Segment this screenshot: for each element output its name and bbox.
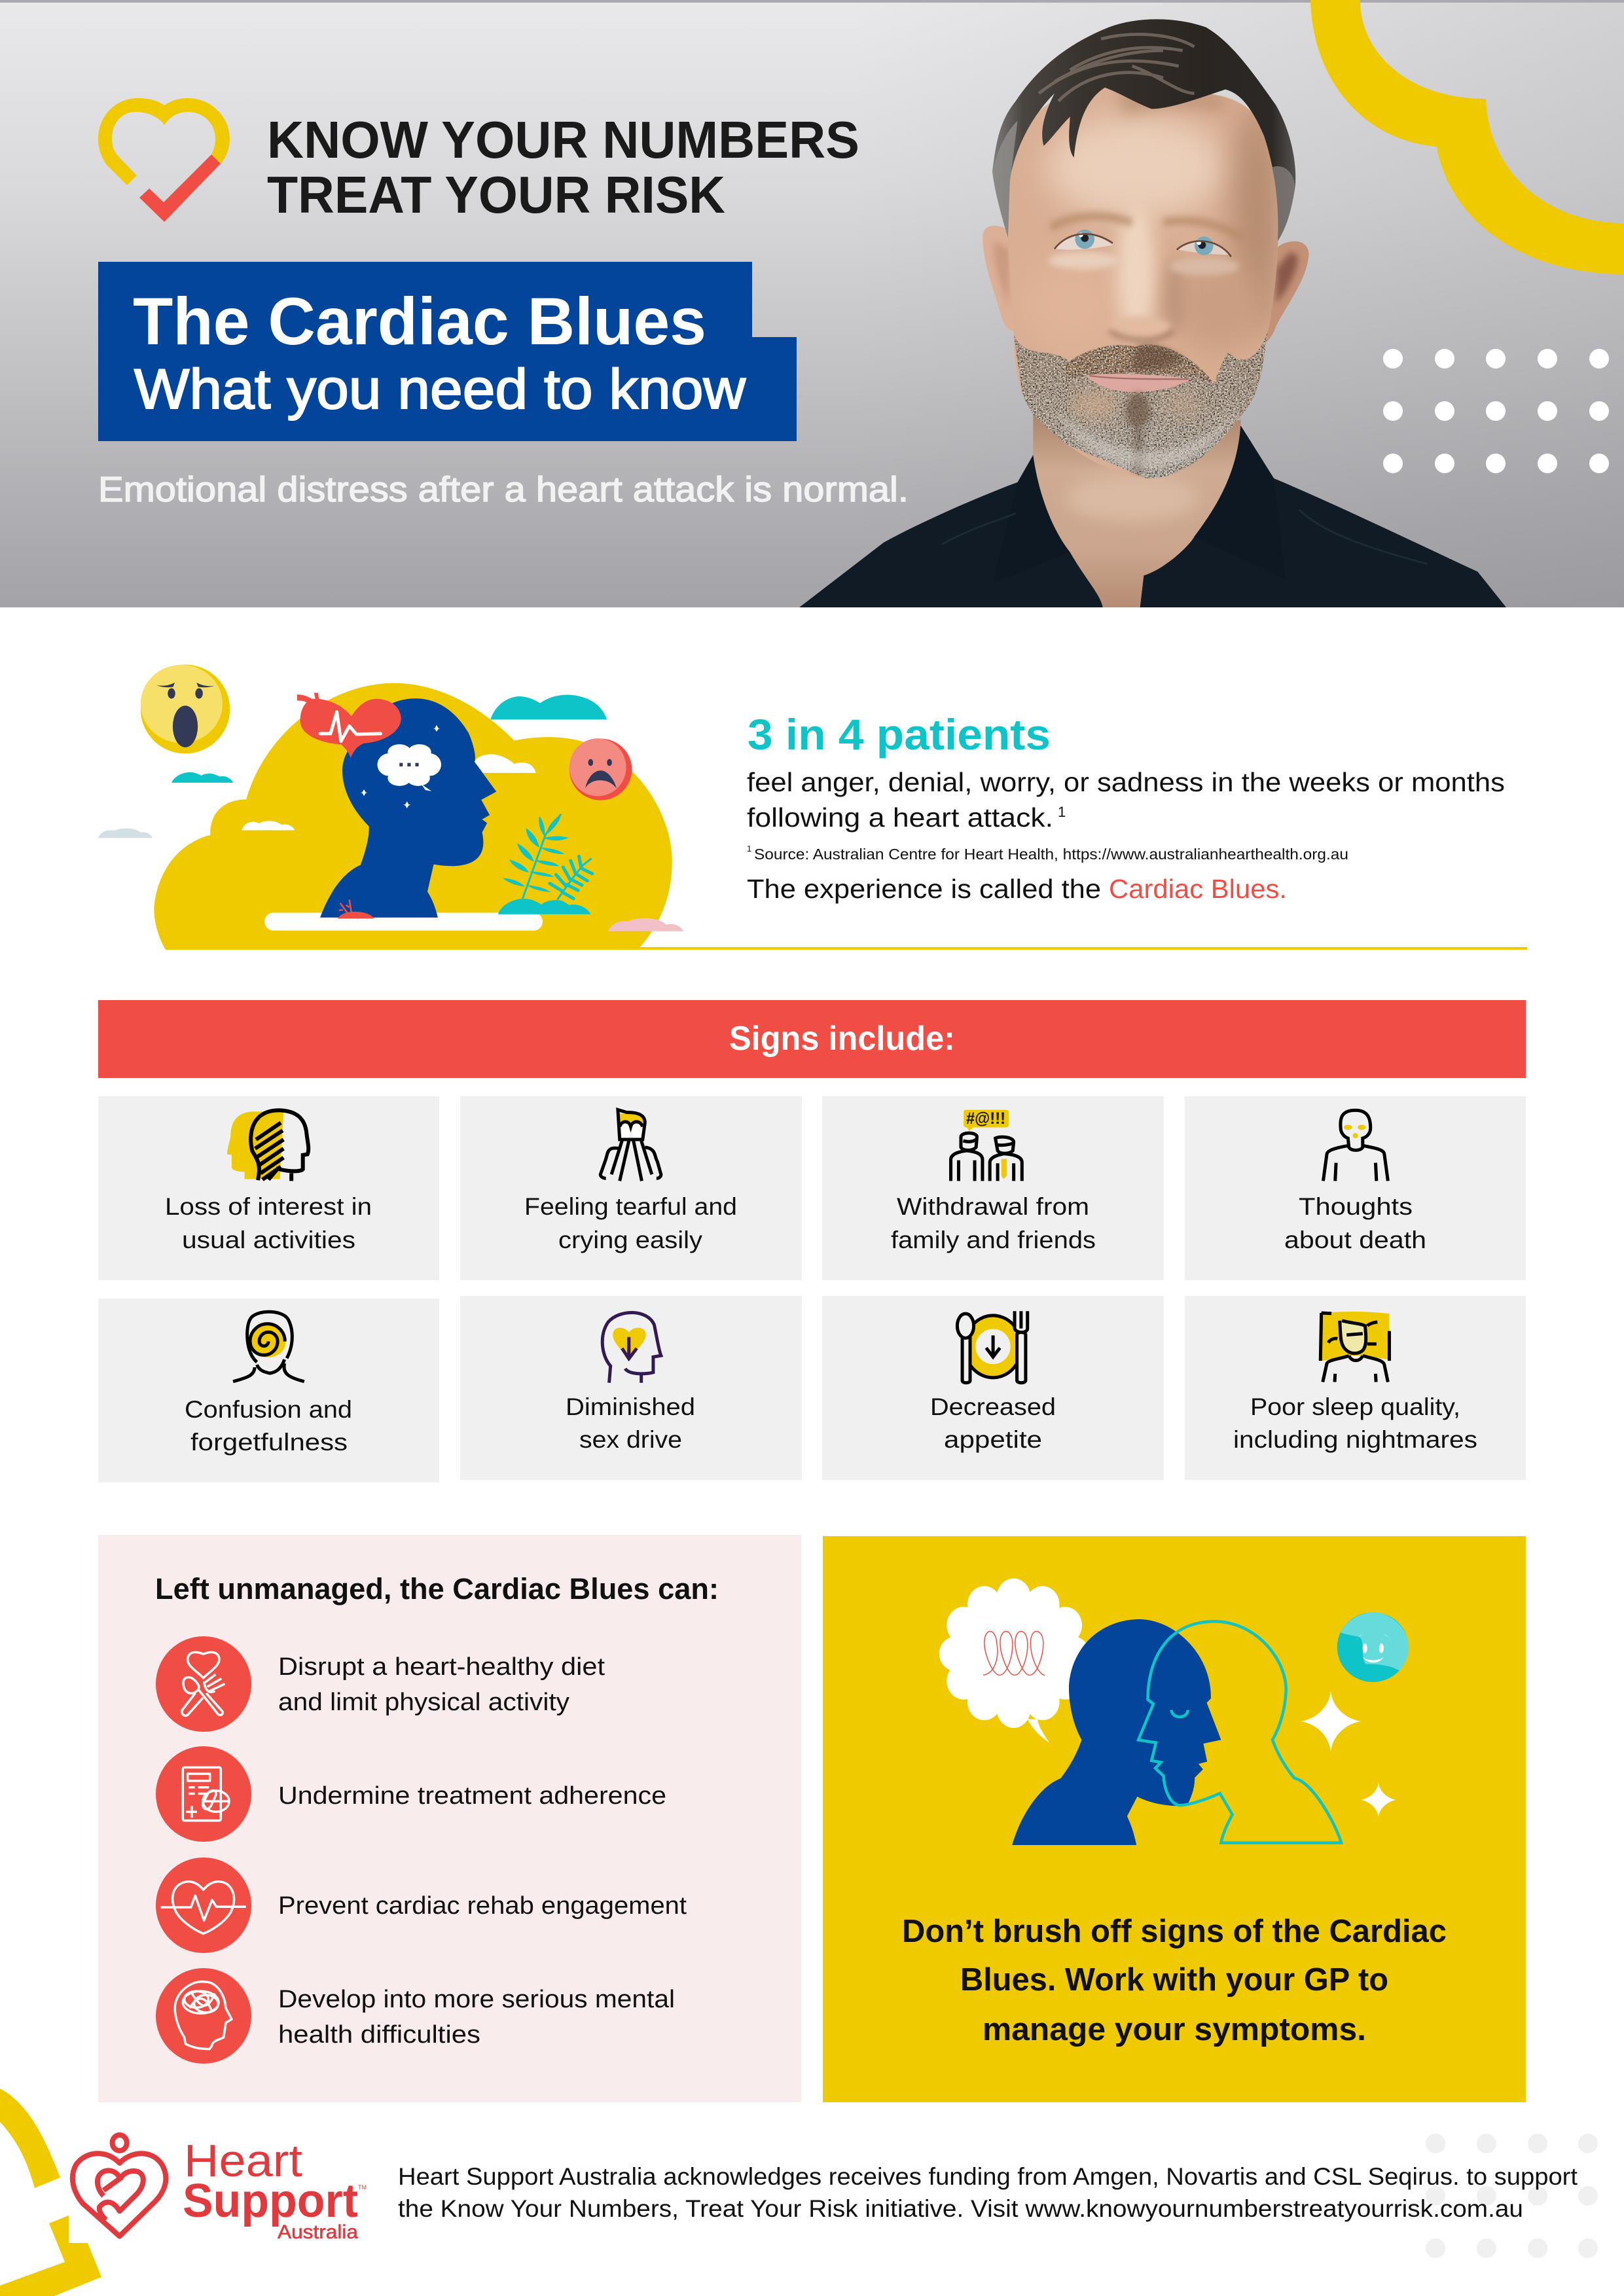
yellow arc decoration — [1310, 0, 1624, 274]
stat: 3 in 4 patients: 3 in 4 patients — [748, 710, 1051, 759]
illustration: two heads — [939, 1579, 1409, 1845]
text: stat description: following a heart attack. — [747, 802, 1053, 833]
text: cardiac blues statement: The experience is called the — [747, 874, 1101, 904]
logo: heart support australia — [73, 2135, 367, 2243]
text: call to action: Don’t brush off signs of the Cardiac — [902, 1914, 1447, 1949]
panel: don't brush off — [823, 1536, 1526, 2102]
text: appetite label: Decreased — [930, 1393, 1056, 1420]
banner: signs include: Signs include: — [729, 1020, 955, 1058]
text: appetite label — [930, 1393, 1056, 1453]
text: risks: Prevent cardiac rehab engagement — [278, 1892, 687, 1920]
logo: heart support australia: Australia — [278, 2221, 358, 2243]
footer grey dot grid — [1426, 2134, 1598, 2258]
text: withdrawal label — [891, 1193, 1096, 1253]
text: risks — [278, 1653, 687, 2049]
text: thoughts label — [1284, 1193, 1426, 1253]
text: sleep label: Poor sleep quality, — [1250, 1393, 1460, 1420]
title block — [98, 262, 797, 441]
text: stat description: feel anger, denial, worry, or sadness in the weeks or months — [747, 767, 1505, 797]
icon: head with heart — [602, 1312, 661, 1383]
text: acknowledgement: Heart Support Australia acknowledges receives funding from Amgen, Novartis and CSL Seqirus. to support — [398, 2163, 1578, 2190]
logo: heart support australia: Heart — [184, 2135, 302, 2186]
text: thoughts label: about death — [1284, 1227, 1426, 1253]
text: confusion label: forgetfulness — [190, 1429, 348, 1456]
logo: heart support australia: Support — [183, 2175, 358, 2227]
text: source footnote: 1 — [747, 844, 751, 853]
heading: know your numbers: TREAT YOUR RISK — [267, 166, 725, 224]
text: stat description — [747, 767, 1505, 833]
footer yellow shape — [0, 2089, 101, 2296]
card: confusion — [98, 1299, 439, 1482]
text: source footnote: Source: Australian Centre for Heart Health, https://www.australianhearthealth.org.au — [754, 846, 1348, 863]
text: risks: and limit physical activity — [278, 1689, 569, 1716]
hero banner — [0, 0, 1624, 611]
text: diminished label: sex drive — [579, 1426, 682, 1453]
illustration: head with heart and emotions — [98, 664, 683, 950]
text: bubble symbols: #@!!! — [966, 1109, 1005, 1128]
text: risks: health difficulties — [278, 2021, 480, 2049]
card: withdrawal — [822, 1096, 1164, 1280]
icon: heart check logo — [98, 98, 230, 222]
text: withdrawal label: Withdrawal from — [897, 1193, 1089, 1220]
panel: left unmanaged — [98, 1535, 801, 2102]
icon: skull figure — [1323, 1110, 1388, 1181]
icon: hands over face — [600, 1110, 661, 1181]
text: sleep label: including nightmares — [1233, 1426, 1477, 1453]
icon: person on pillow — [1320, 1312, 1389, 1382]
text: stat description: 1 — [1058, 804, 1066, 820]
text: diminished label: Diminished — [566, 1393, 695, 1420]
icon: two people with speech bubble — [951, 1110, 1022, 1181]
card: tearful — [460, 1096, 802, 1280]
heading: left unmanaged: Left unmanaged, the Cardiac Blues can: — [155, 1572, 719, 1605]
card: thoughts about death — [1185, 1096, 1526, 1280]
text: cardiac blues statement — [747, 874, 1287, 904]
text: tearful label: crying easily — [558, 1227, 703, 1253]
text: risks: Develop into more serious mental — [278, 1986, 675, 2013]
text: thoughts label: Thoughts — [1299, 1193, 1413, 1220]
text: confusion label — [185, 1396, 352, 1456]
yellow divider line — [628, 947, 1527, 950]
white dot grid — [1383, 349, 1609, 473]
heading: know your numbers: KNOW YOUR NUMBERS — [267, 111, 859, 169]
text: acknowledgement — [398, 2163, 1578, 2222]
title block: The Cardiac Blues — [133, 284, 706, 359]
card: diminished sex drive — [460, 1296, 802, 1480]
text: tearful label — [524, 1193, 737, 1253]
text: tearful label: Feeling tearful and — [524, 1193, 737, 1220]
subtitle: Emotional distress after a heart attack is normal. — [98, 470, 909, 509]
icon circles: risks — [156, 1636, 251, 2064]
card: decreased appetite — [822, 1296, 1164, 1480]
text: risks: Disrupt a heart-healthy diet — [278, 1653, 605, 1681]
banner: signs include — [98, 1000, 1526, 1078]
text: withdrawal label: family and friends — [891, 1227, 1096, 1253]
text: appetite label: appetite — [944, 1426, 1042, 1453]
text: call to action — [902, 1914, 1447, 2047]
card: loss of interest — [98, 1096, 439, 1280]
text: sleep label — [1233, 1393, 1477, 1453]
text: loss of interest label — [165, 1193, 372, 1253]
text: loss of interest label: Loss of interest in — [165, 1193, 372, 1220]
text: call to action: manage your symptoms. — [983, 2012, 1366, 2047]
photo: portrait of man — [795, 19, 1509, 611]
text: risks: Undermine treatment adherence — [278, 1782, 666, 1810]
text: cardiac blues statement: Cardiac Blues. — [1109, 874, 1287, 904]
text: confusion label: Confusion and — [185, 1396, 352, 1423]
logo: heart support australia: TM — [358, 2184, 367, 2191]
icon: plate and cutlery — [957, 1311, 1028, 1383]
text: call to action: Blues. Work with your GP to — [960, 1962, 1388, 1998]
icon: head with spiral — [233, 1312, 304, 1382]
title block: What you need to know — [134, 358, 746, 421]
text: diminished label — [566, 1393, 695, 1453]
card: poor sleep — [1185, 1296, 1526, 1480]
icon: two heads — [227, 1110, 308, 1181]
heading: know your numbers — [267, 122, 857, 213]
text: acknowledgement: the Know Your Numbers, Treat Your Risk initiative. Visit www.knowyournumberstreatyourrisk.com.au — [398, 2195, 1523, 2222]
text: loss of interest label: usual activities — [182, 1227, 355, 1253]
